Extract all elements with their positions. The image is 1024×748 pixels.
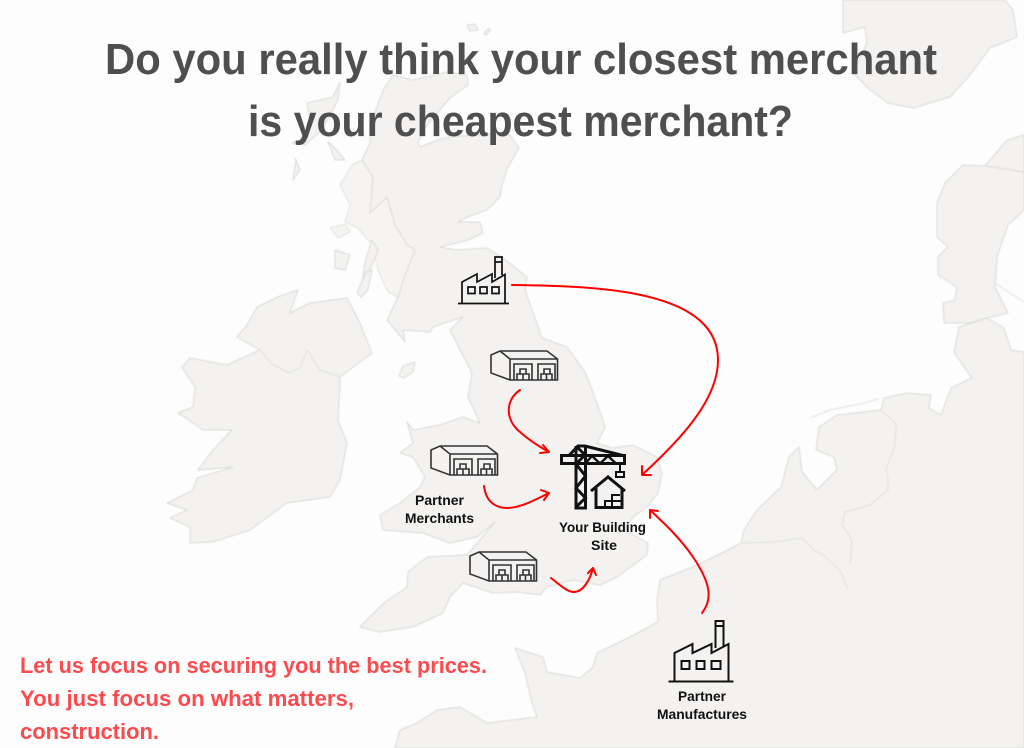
map: internal European borders xyxy=(741,538,848,590)
map: Norway xyxy=(843,0,1017,108)
icon: warehouse middle xyxy=(431,446,498,475)
map: continental Europe xyxy=(395,318,1024,748)
callout: red message: construction. xyxy=(20,719,159,744)
icon: crane and house xyxy=(562,446,625,508)
title: Do you really think your closest merchant xyxy=(105,36,937,84)
map: Ireland xyxy=(167,290,372,543)
map: Isle of Man xyxy=(399,362,415,378)
label: partner manufactures xyxy=(657,688,747,722)
label: partner merchants xyxy=(405,492,474,526)
label: partner manufactures: Partner xyxy=(678,688,727,704)
arrow: partner manufacturer to site xyxy=(650,510,709,613)
map: Scottish islands xyxy=(292,24,490,297)
icon: northern factory xyxy=(458,257,509,304)
label: your building site xyxy=(559,519,646,553)
title: is your cheapest merchant? xyxy=(248,98,793,146)
map: Danish island coast xyxy=(995,283,1024,302)
label: partner merchants: Merchants xyxy=(405,510,474,526)
title xyxy=(105,36,937,146)
arrow: middle warehouse to site xyxy=(484,486,549,508)
arrow: northern factory to site xyxy=(512,285,718,475)
map: Jutland xyxy=(937,165,1024,323)
map: Argyll and west Highland coast fragments xyxy=(330,160,415,297)
label: partner merchants: Partner xyxy=(415,492,465,508)
icon: partner manufacturer factory xyxy=(668,621,734,682)
map: Frisian islands xyxy=(812,399,878,417)
label: partner manufactures: Manufactures xyxy=(657,706,747,722)
map: Great Britain xyxy=(360,72,662,632)
icon: warehouse top xyxy=(491,351,558,380)
callout: red message: Let us focus on securing you the best prices. xyxy=(20,653,487,678)
callout: red message: You just focus on what matters, xyxy=(20,686,354,711)
label: your building site: Your Building xyxy=(559,519,646,535)
icon: warehouse bottom xyxy=(470,552,536,581)
arrow: bottom warehouse to site xyxy=(551,568,596,592)
arrow: top warehouse to site xyxy=(509,390,549,453)
callout: red message xyxy=(20,653,487,744)
map: Sweden corner xyxy=(985,135,1024,172)
label: your building site: Site xyxy=(591,537,617,553)
map: Northern Ireland border xyxy=(260,350,340,377)
